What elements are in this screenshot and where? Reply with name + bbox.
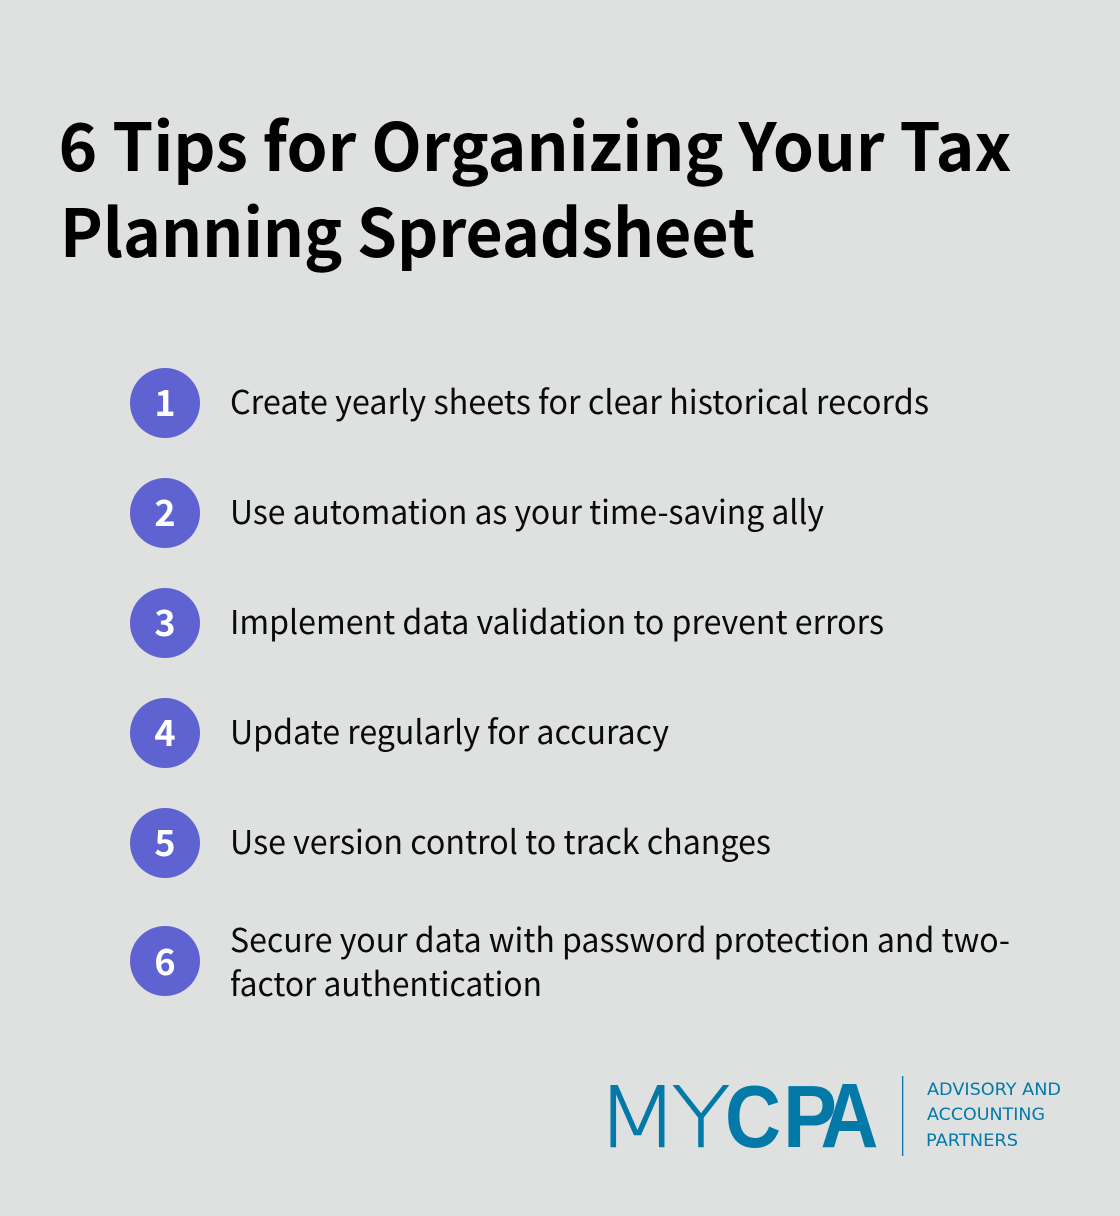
title: 6 Tips for Organizing Your Tax	[58, 95, 1012, 191]
logo wordmark	[595, 1065, 878, 1168]
number badge 4	[130, 698, 200, 768]
logo wordmark: C	[725, 1067, 781, 1166]
tip 6	[130, 914, 1010, 1006]
number badge 2: 2	[154, 485, 176, 537]
tip 6 text: factor authentication	[230, 958, 542, 1006]
tip 2	[130, 478, 824, 548]
number badge 3	[130, 588, 200, 658]
tip 3	[130, 588, 884, 658]
number badge 3: 3	[154, 595, 176, 647]
tip 1	[130, 368, 929, 438]
logo: MYCPA	[595, 1065, 1061, 1168]
logo tagline	[926, 1080, 1061, 1150]
title: Planning Spreadsheet	[60, 181, 755, 277]
tip 6 text	[230, 914, 1010, 1006]
number badge 2	[130, 478, 200, 548]
number badge 5	[130, 808, 200, 878]
logo wordmark: M	[595, 1069, 680, 1168]
tip 1 text: Create yearly sheets for clear historical records	[230, 376, 929, 424]
tip 5	[130, 808, 771, 878]
tip 2 text: Use automation as your time-saving ally	[230, 486, 824, 534]
number badge 5: 5	[154, 815, 176, 867]
number badge 6: 6	[154, 934, 176, 986]
number badge 6	[130, 926, 200, 996]
number badge 1: 1	[154, 375, 176, 427]
logo wordmark: A	[820, 1065, 878, 1167]
logo tagline: ADVISORY AND	[927, 1080, 1061, 1099]
tip 6 text: Secure your data with password protection and two-	[230, 914, 1010, 962]
logo tagline: PARTNERS	[926, 1131, 1018, 1150]
tip 4 text: Update regularly for accuracy	[230, 706, 669, 754]
logo tagline: ACCOUNTING	[927, 1105, 1045, 1124]
logo divider	[902, 1076, 903, 1156]
title	[58, 95, 1012, 277]
number badge 4: 4	[154, 705, 176, 757]
tip 5 text: Use version control to track changes	[230, 816, 771, 864]
number badge 1	[130, 368, 200, 438]
logo wordmark: Y	[671, 1069, 731, 1168]
tip 4	[130, 698, 669, 768]
logo wordmark: P	[783, 1067, 837, 1166]
tip 3 text: Implement data validation to prevent errors	[230, 596, 884, 644]
